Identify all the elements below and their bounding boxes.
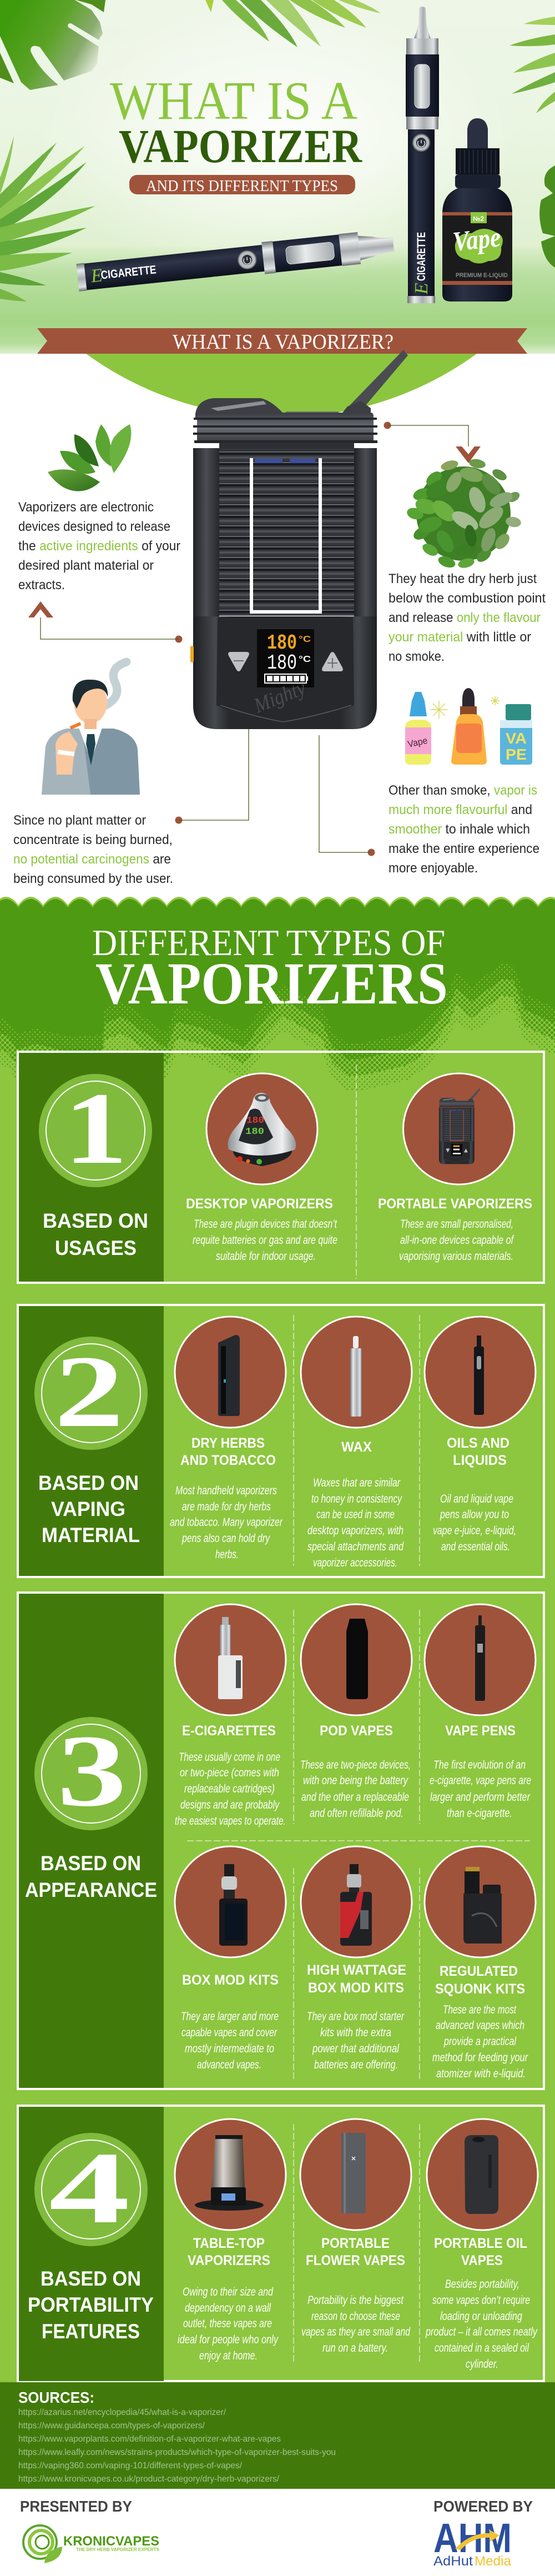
item: e-cigarettes: or two-piece (comes with [180, 1766, 279, 1779]
item: table-top vaporizers: outlet, these vapes are [183, 2317, 272, 2330]
icon: monstera leaf top left [0, 0, 105, 90]
item: oils and liquids: LIQUIDS [453, 1453, 507, 1468]
item: table-top vaporizers: ideal for people who only [178, 2333, 279, 2346]
item: pod vapes [300, 1604, 412, 1820]
product: volcano desktop vaporizer: 180 [245, 1127, 264, 1137]
text block: heat the dry herb: They heat the dry herb just [389, 571, 537, 586]
item: portable vaporizers: These are small personalised, [400, 1218, 513, 1231]
arrow: connector to carcinogen text [175, 729, 249, 824]
logo: Kronicvapes [23, 2525, 160, 2563]
text block: vaporizers intro: the active ingredients of your [18, 539, 180, 554]
item: high wattage box mod kits: power that additional [312, 2042, 400, 2055]
number badge 2 [34, 1335, 148, 1450]
arrow: connector to intro text [28, 601, 182, 643]
text block: heat the dry herb [389, 571, 546, 664]
logo: AdHut Media: Media [475, 2554, 512, 2569]
product: table-top vaporizer [195, 2135, 264, 2211]
text block: vaporizers intro [18, 500, 180, 592]
bottle: pink vape: Vape [407, 735, 428, 750]
item: portable flower vapes: reason to choose these [311, 2310, 400, 2323]
heading: different types of vaporizers: DIFFERENT TYPES OF [92, 922, 445, 963]
text block: heat the dry herb: your material with little or [389, 630, 531, 645]
sources list: https://azarius.net/encyclopedia/45/what-is-a-vaporizer/ [18, 2408, 226, 2417]
illustration: e-liquid bottles [405, 688, 532, 765]
item: portable flower vapes: FLOWER VAPES [306, 2253, 405, 2268]
heading: different types of vaporizers: VAPORIZERS [95, 951, 448, 1017]
text block: heat the dry herb: no smoke. [389, 649, 445, 664]
item: box mod kits: mostly intermediate to [185, 2042, 274, 2055]
item: oils and liquids: and essential oils. [441, 1540, 510, 1553]
device knob [190, 646, 194, 662]
sources list: https://www.kronicvapes.co.uk/product-category/dry-herb-vaporizers/ [18, 2474, 280, 2484]
panel 2: based on vaping material [18, 1305, 544, 1577]
item: vape pens: The first evolution of an [433, 1759, 526, 1771]
item: portable vaporizers: PORTABLE VAPORIZERS [378, 1196, 532, 1212]
label: based on usages: BASED ON [43, 1209, 148, 1232]
text block: vaporizers intro: devices designed to release [18, 519, 170, 534]
logo: AdHut Media: AdHut [433, 2554, 473, 2569]
product: pod vape [346, 1619, 368, 1699]
number badge 4: 4 [49, 2131, 130, 2245]
item: e-cigarettes [175, 1604, 286, 1827]
arrow: connector to flavour text [319, 735, 375, 856]
sources list: https://vaping360.com/vaping-101/different-types-of-vapes/ [18, 2461, 243, 2470]
text block: no carcinogens: Since no plant matter or [13, 813, 146, 828]
item: portable vaporizers: all-in-one devices capable of [400, 1234, 514, 1247]
item: dry herbs and tobacco: DRY HERBS [191, 1435, 265, 1451]
product: portable vaporizer [439, 1088, 481, 1164]
item: dry herbs and tobacco: pens also can hold dry [181, 1532, 270, 1545]
panel 3: based on appearance [18, 1593, 544, 2089]
arrow: connector to herbs [384, 422, 481, 463]
item: high wattage box mod kits: HIGH WATTAGE [307, 1962, 406, 1978]
illustration: horizontal e-cigarette: CIGARETTE [100, 263, 157, 282]
item: vape pens: VAPE PENS [445, 1723, 516, 1739]
item: regulated squonk kits: method for feeding your [432, 2051, 528, 2064]
item: wax: desktop vaporizers, with [307, 1524, 403, 1537]
item: table-top vaporizers: Owing to their size and [183, 2286, 274, 2298]
item: portable oil vapes [425, 2119, 538, 2371]
label: based on vaping material: VAPING [51, 1498, 125, 1520]
sparkle marks [430, 696, 500, 719]
item: regulated squonk kits: provide a practical [443, 2035, 517, 2048]
item: dry herbs and tobacco: AND TOBACCO [180, 1453, 276, 1468]
item: box mod kits: capable vapes and cover [181, 2026, 278, 2039]
item: portable oil vapes: cylinder. [466, 2358, 498, 2371]
text block: vaporizers intro: extracts. [18, 578, 65, 592]
number badge 3: 3 [57, 1714, 127, 1828]
item: wax: vaporizer accessories. [313, 1556, 397, 1569]
item: high wattage box mod kits: They are box mod starter [307, 2010, 405, 2023]
device display readout [265, 631, 311, 683]
item: dry herbs and tobacco: Most handheld vaporizers [175, 1484, 277, 1497]
item: oils and liquids: Oil and liquid vape [440, 1493, 513, 1505]
text block: vaporizers intro: desired plant material or [18, 558, 154, 573]
item: desktop vaporizers [186, 1073, 337, 1263]
product: wax pen [350, 1336, 362, 1417]
illustration: e-liquid bottle: PREMIUM E-LIQUID [456, 272, 508, 279]
item: wax: WAX [341, 1439, 372, 1455]
powered by: POWERED BY [433, 2498, 533, 2515]
heading: different types of vaporizers [92, 922, 448, 1017]
label: based on usages [43, 1209, 148, 1259]
illustration: horizontal e-cigarette: E [89, 265, 104, 287]
item: portable flower vapes: Portability is the biggest [307, 2294, 404, 2307]
item: pod vapes: These are two-piece devices, [300, 1759, 411, 1771]
text block: heat the dry herb: below the combustion point [389, 591, 546, 606]
text block: vaporizers intro: Vaporizers are electronic [18, 500, 154, 515]
item: desktop vaporizers: DESKTOP VAPORIZERS [186, 1196, 333, 1212]
item: box mod kits [175, 1846, 286, 2071]
logo: AdHut Media: AHM [433, 2515, 512, 2561]
item: dry herbs and tobacco: are made for dry herbs [182, 1500, 271, 1513]
number badge 4 [34, 2131, 148, 2246]
sources list: https://www.leafly.com/news/strains-products/which-type-of-vaporizer-best-suits-you [18, 2448, 336, 2457]
item: e-cigarettes: designs and are probably [180, 1799, 280, 1811]
bottle: pink vape [405, 692, 431, 765]
illustration: e-liquid bottle: №2 [473, 215, 484, 223]
text block: vapor is more flavourful: much more flavourful and [389, 802, 532, 817]
item: portable vaporizers [378, 1073, 532, 1263]
text block: no carcinogens [13, 813, 173, 886]
sources list [18, 2408, 336, 2484]
text block: no carcinogens: no potential carcinogens are [13, 852, 171, 867]
sources list: https://www.guidancepa.com/types-of-vaporizers/ [18, 2421, 205, 2431]
item: e-cigarettes: the easiest vapes to operate. [175, 1815, 286, 1827]
product: oil vape pen [474, 1335, 484, 1415]
product: volcano desktop vaporizer: 180 [246, 1116, 264, 1126]
item: high wattage box mod kits: kits with the extra [320, 2026, 391, 2039]
item: e-cigarettes: replaceable cartridges) [184, 1782, 275, 1795]
section banner: what is a vaporizer [37, 328, 527, 354]
text block: no carcinogens: being consumed by the user. [13, 871, 173, 886]
label: based on portability features: FEATURES [42, 2320, 140, 2343]
item: box mod kits: They are larger and more [181, 2010, 279, 2023]
item: regulated squonk kits: REGULATED [440, 1964, 518, 1979]
item: box mod kits: advanced vapes. [197, 2058, 261, 2071]
item: high wattage box mod kits: BOX MOD KITS [308, 1980, 404, 1996]
number badge 1 [39, 1072, 152, 1187]
label: based on appearance: BASED ON [41, 1852, 141, 1875]
powered by [433, 2498, 533, 2569]
item: oils and liquids: pens allow you to [440, 1508, 509, 1521]
hero panel [0, 0, 555, 354]
item: wax: to honey in consistency [311, 1493, 402, 1505]
illustration: e-liquid bottle [442, 118, 512, 302]
item: portable oil vapes: loading or unloading [440, 2310, 522, 2323]
illustration: Mighty vaporizer device [190, 350, 408, 729]
title [110, 71, 362, 173]
item: table-top vaporizers [175, 2119, 286, 2362]
item: portable flower vapes: vapes as they are small and [301, 2326, 411, 2338]
bottle: orange dropper [451, 688, 487, 765]
item: table-top vaporizers: enjoy at home. [199, 2349, 258, 2362]
product: e-cigarette box [218, 1617, 243, 1699]
item: oils and liquids: vape e-juice, e-liquid, [433, 1524, 516, 1537]
item: table-top vaporizers: TABLE-TOP [193, 2236, 265, 2251]
item: regulated squonk kits: advanced vapes which [436, 2019, 524, 2032]
icon: palm fronds top centre [205, 0, 381, 47]
bottle: blue vape: VA [506, 730, 527, 747]
icon: palm fronds left [0, 136, 95, 302]
number badge 3 [34, 1714, 148, 1830]
presented by: PRESENTED BY [20, 2498, 132, 2515]
label: based on appearance: APPEARANCE [25, 1879, 157, 1901]
text block: vapor is more flavourful: make the entire experience [389, 841, 539, 856]
item: table-top vaporizers: VAPORIZERS [188, 2253, 270, 2268]
panel 1: based on usages [18, 1052, 544, 1283]
device display readout: °C [299, 635, 311, 644]
illustration: vertical e-cigarette [406, 7, 439, 303]
item: wax: Waxes that are similar [313, 1477, 401, 1489]
item: wax [301, 1317, 412, 1569]
item: regulated squonk kits: atomizer with e-liquid. [436, 2067, 526, 2080]
label: based on vaping material [38, 1472, 140, 1546]
number badge 2: 2 [54, 1335, 124, 1449]
product: dry herb pen [218, 1335, 240, 1416]
label: based on portability features [28, 2267, 154, 2343]
illustration: herb bundle [406, 458, 522, 570]
item: desktop vaporizers: suitable for indoor usage. [216, 1250, 316, 1263]
item: oils and liquids: OILS AND [447, 1435, 509, 1451]
sources heading: SOURCES: [18, 2389, 94, 2406]
sources list: https://www.vaporplants.com/definition-of-a-vaporizer-what-are-vapes [18, 2434, 281, 2444]
item: portable oil vapes: Besides portability, [445, 2278, 519, 2291]
product: oil vape box [465, 2135, 498, 2214]
item: portable oil vapes: VAPES [461, 2253, 503, 2268]
sources band [0, 2382, 555, 2489]
product: flower vape [341, 2133, 366, 2213]
item: high wattage box mod kits: batteries are offering. [314, 2058, 398, 2071]
item: pod vapes: and the other a replaceable [301, 1791, 409, 1804]
item: pod vapes: with one being the battery [303, 1774, 408, 1787]
presented by [20, 2498, 160, 2563]
item: pod vapes: POD VAPES [320, 1723, 393, 1739]
text block: no carcinogens: concentrate is being burned, [13, 832, 173, 847]
item: wax: special attachments and [307, 1540, 404, 1553]
background: green types section with wave top and halftone [0, 897, 555, 2382]
item: pod vapes: and often refillable pod. [310, 1807, 403, 1820]
item: dry herbs and tobacco: and tobacco. Many vaporizer [170, 1516, 283, 1529]
item: e-cigarettes: E-CIGARETTES [182, 1723, 276, 1739]
item: oils and liquids [425, 1317, 536, 1553]
item: regulated squonk kits: These are the most [443, 2003, 517, 2016]
device buttons [228, 652, 343, 671]
text block: vapor is more flavourful [389, 783, 539, 876]
label: based on portability features: PORTABILITY [28, 2293, 154, 2316]
label: based on vaping material: MATERIAL [42, 1524, 140, 1546]
product: high wattage mod [340, 1864, 372, 1946]
icon: palm fronds right [509, 17, 555, 113]
item: box mod kits: BOX MOD KITS [182, 1972, 279, 1988]
item: vape pens: than e-cigarette. [447, 1807, 512, 1820]
logo: Kronicvapes: KRONICVAPES [63, 2534, 159, 2549]
illustration: e-liquid bottle: Vape [451, 221, 502, 257]
device script logo: Mighty [250, 676, 309, 718]
illustration: vertical e-cigarette: CIGARETTE [415, 232, 428, 281]
title: VAPORIZER [119, 119, 362, 173]
title: WHAT IS A [110, 71, 357, 131]
illustration: man smoking [42, 662, 140, 795]
green half circle behind device [86, 354, 477, 418]
logo: Kronicvapes: THE DRY HERB VAPORIZER EXPERTS [76, 2547, 160, 2552]
product: box mod [219, 1864, 248, 1946]
bottle: blue vape: PE [506, 746, 527, 763]
text block: vapor is more flavourful: more enjoyable. [389, 861, 478, 876]
item: portable oil vapes: PORTABLE OIL [434, 2236, 527, 2251]
item: vape pens [425, 1604, 536, 1820]
label: based on appearance [25, 1852, 157, 1901]
text block: vapor is more flavourful: smoother to inhale which [389, 822, 530, 837]
icon: monstera leaf right [539, 165, 555, 268]
number badge 1: 1 [64, 1072, 128, 1186]
item: dry herbs and tobacco: herbs. [215, 1548, 239, 1561]
product: vape pen [475, 1615, 485, 1701]
section banner: what is a vaporizer: WHAT IS A VAPORIZER? [173, 330, 393, 354]
item: e-cigarettes: These usually come in one [179, 1751, 280, 1764]
device rib slots [250, 458, 322, 614]
text block: heat the dry herb: and release only the flavour [389, 610, 541, 625]
item: desktop vaporizers: These are plugin devices that doesn’t [194, 1218, 337, 1231]
item: regulated squonk kits [425, 1846, 536, 2080]
device display readout: 180 [267, 631, 297, 655]
product: squonk kit [463, 1867, 502, 1944]
item: desktop vaporizers: requite batteries or gas and are quite [193, 1234, 337, 1247]
item: portable flower vapes: run on a battery. [322, 2342, 388, 2354]
item: wax: can be used in some [316, 1508, 395, 1521]
item: portable vaporizers: vaporising various materials. [399, 1250, 513, 1263]
icon: green leaves [48, 424, 131, 491]
item: portable flower vapes: PORTABLE [321, 2236, 390, 2251]
product: volcano desktop vaporizer [228, 1093, 296, 1166]
item: dry herbs and tobacco [170, 1317, 286, 1561]
illustration: horizontal e-cigarette [76, 228, 395, 294]
device display readout: 180 [267, 651, 297, 675]
bottle: blue vape [500, 704, 532, 765]
panel 4: based on portability features [18, 2106, 544, 2381]
text block: vapor is more flavourful: Other than smoke, vapor is [389, 783, 537, 798]
item: portable flower vapes [300, 2119, 411, 2354]
device display readout: °C [299, 655, 311, 664]
label: based on vaping material: BASED ON [38, 1472, 139, 1494]
label: based on usages: USAGES [55, 1237, 137, 1259]
item: table-top vaporizers: dependency on a wall [185, 2302, 271, 2314]
illustration: vertical e-cigarette: E [411, 283, 432, 295]
item: high wattage box mod kits [301, 1846, 412, 2071]
item: regulated squonk kits: SQUONK KITS [435, 1981, 525, 1997]
subtitle pill: AND ITS DIFFERENT TYPES [146, 178, 338, 195]
label: based on portability features: BASED ON [41, 2267, 141, 2290]
